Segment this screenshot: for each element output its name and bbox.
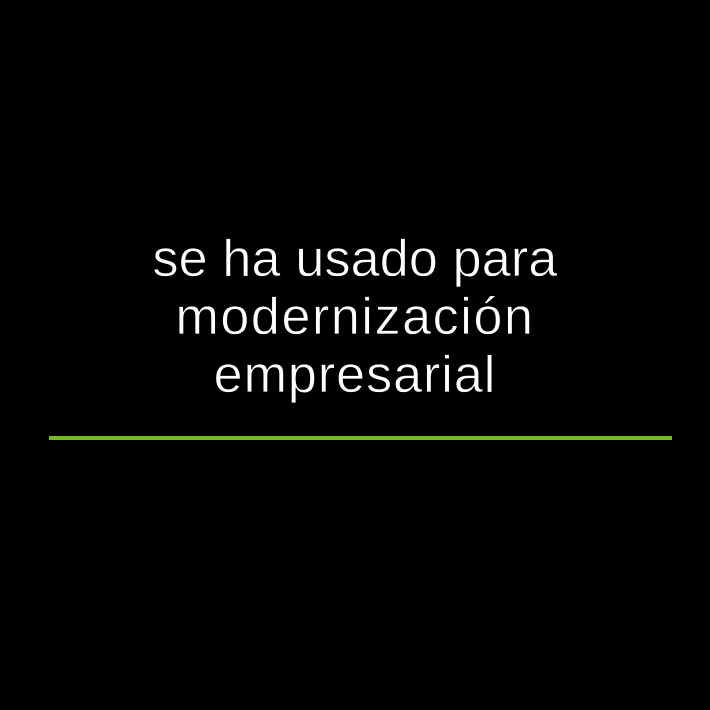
heading text: se ha usado para (152, 230, 558, 288)
heading text: modernización (176, 288, 534, 346)
green divider line (49, 436, 672, 440)
heading text: empresarial (214, 346, 496, 404)
heading text (152, 230, 558, 404)
